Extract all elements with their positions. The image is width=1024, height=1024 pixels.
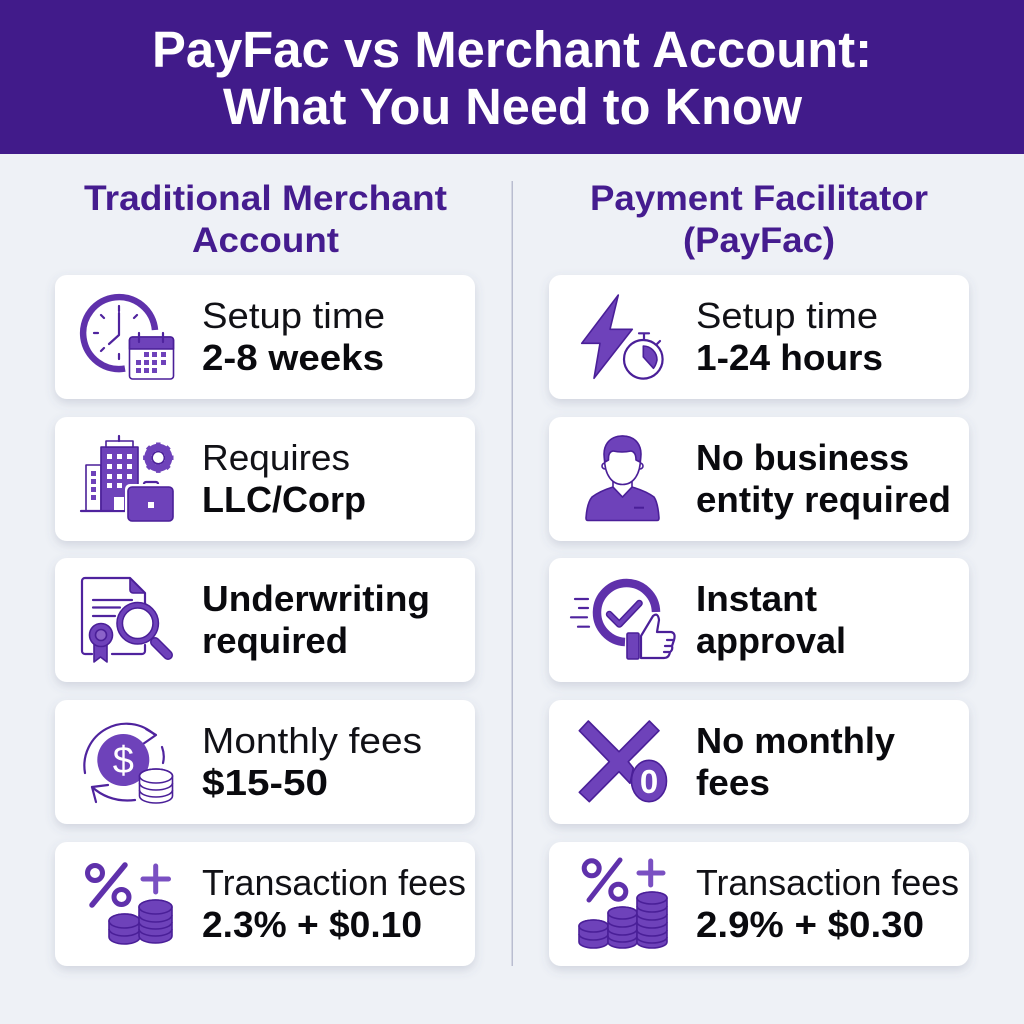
heading: traditional merchant account: Account: [192, 221, 339, 260]
label: transaction fees: [202, 862, 466, 945]
icon: person: [586, 436, 659, 520]
heading: traditional merchant account: Traditional Merchant: [84, 179, 447, 218]
label: monthly fees: [202, 720, 422, 803]
label: instant approval: [696, 578, 846, 661]
label: no business entity required: entity required: [696, 479, 951, 520]
label: setup time: Setup time: [696, 295, 878, 336]
label: setup time: Setup time: [202, 295, 385, 336]
label: transaction fees: 2.9% + $0.30: [696, 904, 924, 945]
label: instant approval: approval: [696, 620, 846, 661]
label: no business entity required: No business: [696, 437, 909, 478]
label: setup time: 2-8 weeks: [202, 337, 384, 378]
label: transaction fees: 2.3% + $0.10: [202, 904, 422, 945]
label: underwriting required: required: [202, 620, 348, 661]
icon: cross with zero: [579, 721, 666, 802]
card: payfac transaction fees: [549, 842, 969, 966]
label: no monthly fees: fees: [696, 762, 770, 803]
card: merchant setup time: [55, 275, 475, 399]
label: requires LLC/Corp: [202, 437, 366, 520]
icon: buildings, gear and briefcase: [81, 436, 176, 523]
title: [152, 21, 872, 135]
card: merchant business requirement: [55, 417, 475, 541]
label: transaction fees: Transaction fees: [696, 862, 959, 903]
header banner: [0, 0, 1024, 154]
icon: check ring and thumbs up: [571, 583, 675, 659]
heading: payment facilitator: Payment Facilitator: [590, 179, 928, 218]
card: merchant transaction fees: [55, 842, 475, 966]
icon: dollar coin cycle: [84, 724, 172, 803]
label: no business entity required: [696, 437, 951, 520]
icon: cross with zero: 0: [640, 763, 658, 800]
title: PayFac vs Merchant Account:: [152, 21, 872, 78]
label: setup time: 1-24 hours: [696, 337, 883, 378]
label: underwriting required: Underwriting: [202, 578, 430, 619]
label: no monthly fees: [696, 720, 895, 803]
icon: dollar coin cycle: $: [113, 740, 134, 782]
label: setup time: [202, 295, 385, 378]
card: merchant monthly fees: [55, 700, 475, 824]
label: instant approval: Instant: [696, 578, 817, 619]
icon: lightning bolt and stopwatch: [582, 295, 663, 379]
label: monthly fees: Monthly fees: [202, 720, 422, 761]
label: requires LLC/Corp: LLC/Corp: [202, 479, 366, 520]
label: requires LLC/Corp: Requires: [202, 437, 350, 478]
label: underwriting required: [202, 578, 430, 661]
label: monthly fees: $15-50: [202, 762, 328, 803]
card: payfac no monthly fees: [549, 700, 969, 824]
card: payfac no entity: [549, 417, 969, 541]
card: payfac instant approval: [549, 558, 969, 682]
icon: percent, plus and coin stacks: [579, 860, 667, 948]
icon: percent, plus and coins: [88, 865, 172, 944]
title: What You Need to Know: [223, 78, 802, 135]
label: transaction fees: [696, 862, 959, 945]
card: merchant underwriting: [55, 558, 475, 682]
label: transaction fees: Transaction fees: [202, 862, 466, 903]
heading: traditional merchant account: [84, 179, 447, 260]
icon: clock and calendar: [83, 297, 174, 379]
label: setup time: [696, 295, 883, 378]
heading: payment facilitator: [590, 179, 928, 260]
heading: payment facilitator: (PayFac): [683, 221, 835, 260]
label: no monthly fees: No monthly: [696, 720, 895, 761]
icon: document with seal and magnifier: [82, 578, 168, 662]
card: payfac setup time: [549, 275, 969, 399]
